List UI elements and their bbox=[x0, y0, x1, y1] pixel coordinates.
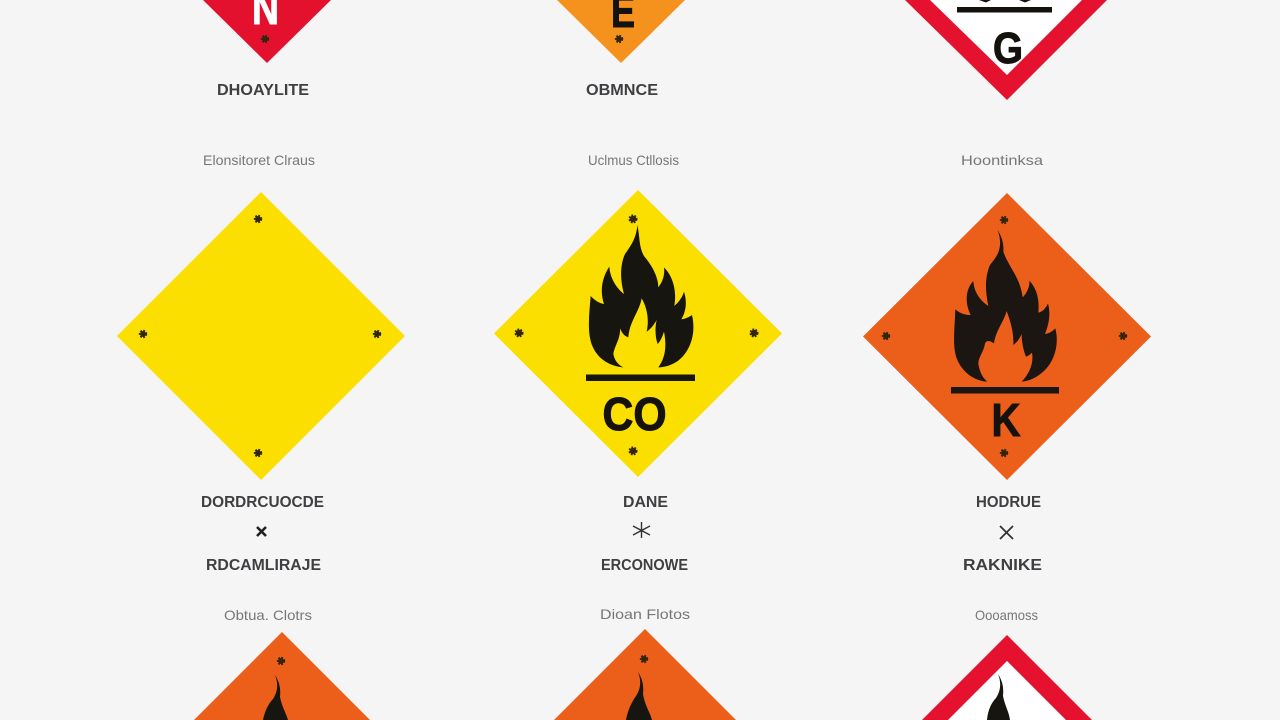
bolt dot bbox=[262, 36, 268, 42]
code CO: CO bbox=[602, 388, 666, 440]
class heading lower middle: Dioan Flotos bbox=[600, 606, 690, 622]
caption top: DANE bbox=[623, 494, 668, 511]
flame remnants bbox=[979, 0, 1031, 2]
panel: red-border diamond G (top right) bbox=[905, 0, 1107, 100]
panel: orange flame diamond lower left bbox=[194, 632, 370, 720]
class heading left: Elonsitoret Clraus bbox=[203, 152, 315, 168]
bolt dots bbox=[883, 217, 1126, 456]
panel: orange flame diamond lower middle bbox=[554, 629, 736, 720]
orange diamond bbox=[554, 629, 736, 720]
caption block middle bbox=[601, 494, 688, 574]
cross mark bbox=[257, 527, 266, 536]
bolt dot bbox=[641, 656, 647, 662]
panel: orange diamond E (top middle) bbox=[557, 0, 685, 99]
icon: flame bbox=[954, 230, 1057, 382]
star mark bbox=[633, 522, 650, 538]
panel: red-border flame diamond lower right bbox=[922, 635, 1092, 720]
bolt dot bbox=[278, 658, 284, 664]
cross mark bbox=[1000, 526, 1013, 539]
base line bbox=[951, 387, 1059, 394]
class heading middle: Uclmus Ctllosis bbox=[588, 152, 679, 168]
caption bottom: ERCONOWE bbox=[601, 557, 688, 574]
red border diamond bbox=[922, 635, 1092, 720]
icon: flame tip bbox=[987, 674, 1010, 720]
caption block right bbox=[963, 494, 1042, 574]
letter G: G bbox=[993, 24, 1023, 73]
panel: blank yellow diamond bbox=[117, 192, 405, 480]
caption bottom: RDCAMLIRAJE bbox=[206, 557, 321, 574]
icon: flame tip bbox=[626, 672, 652, 720]
class heading right: Hoontinksa bbox=[961, 152, 1043, 168]
yellow diamond bbox=[117, 192, 405, 480]
caption top: DORDRCUOCDE bbox=[201, 494, 324, 511]
white inner diamond bbox=[930, 0, 1082, 75]
caption block left bbox=[201, 494, 324, 574]
code K: K bbox=[992, 394, 1020, 446]
icon: flame bbox=[589, 225, 693, 367]
caption bottom: RAKNIKE bbox=[963, 557, 1042, 574]
panel: orange flame diamond K bbox=[863, 193, 1151, 480]
white inner diamond bbox=[948, 661, 1066, 720]
red diamond bbox=[203, 0, 331, 63]
caption top: HODRUE bbox=[976, 494, 1041, 511]
red border diamond bbox=[905, 0, 1107, 100]
class heading lower right: Oooamoss bbox=[975, 607, 1038, 623]
orange diamond bbox=[863, 193, 1151, 480]
orange diamond bbox=[557, 0, 685, 63]
label: DHOAYLITE bbox=[217, 82, 309, 99]
label: OBMNCE bbox=[586, 82, 658, 99]
bolt dots bbox=[516, 216, 757, 454]
base line bbox=[586, 374, 695, 381]
panel: yellow flame diamond CO bbox=[494, 190, 782, 477]
class heading lower left: Obtua. Clotrs bbox=[224, 607, 312, 623]
bolt dots bbox=[140, 216, 380, 456]
panel: red diamond N (top left) bbox=[203, 0, 331, 99]
yellow diamond bbox=[494, 190, 782, 477]
orange diamond bbox=[194, 632, 370, 720]
bolt dot bbox=[616, 36, 622, 42]
icon: flame tip bbox=[263, 675, 288, 720]
base line bbox=[957, 7, 1052, 12]
